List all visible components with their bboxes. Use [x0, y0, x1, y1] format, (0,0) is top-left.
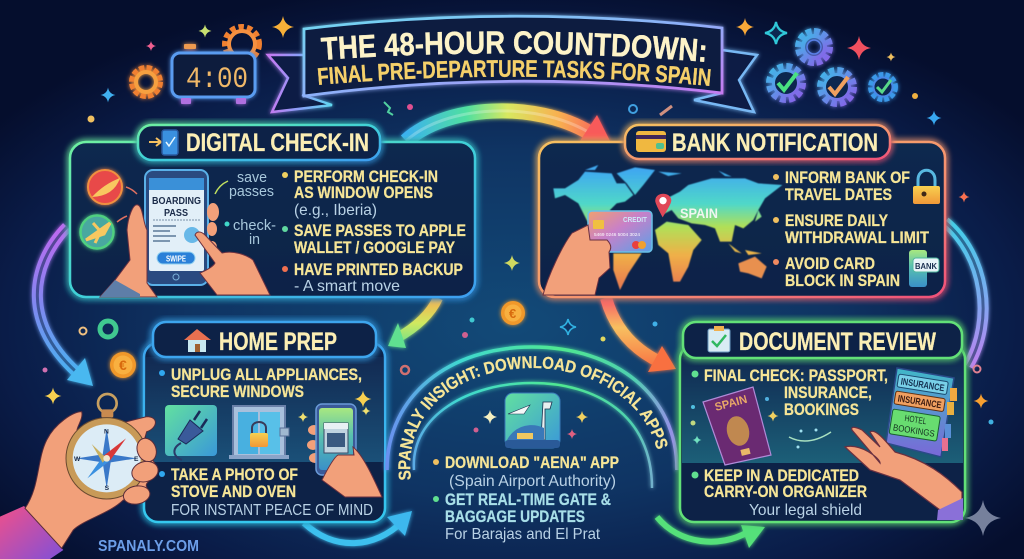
- bullet text bottom: KEEP IN A DEDICATED: [704, 467, 859, 485]
- phone with stove and hand: [307, 404, 382, 497]
- tab hotel bookings: BOOKINGS: [892, 422, 935, 439]
- bullet text top: SECURE WINDOWS: [171, 383, 304, 401]
- arrow: digital check-in to compass: [37, 227, 93, 386]
- bullet text top: [159, 366, 362, 401]
- compass letters: E: [134, 456, 139, 463]
- ribbon right tail: [694, 50, 757, 112]
- bullet text: INFORM BANK OF: [785, 169, 910, 187]
- panel frame: [680, 345, 965, 522]
- bullet text bottom: FOR INSTANT PEACE OF MIND: [171, 502, 373, 519]
- passport: SPAIN: [714, 394, 749, 414]
- palm: [322, 447, 382, 497]
- caption check-in: in: [249, 232, 260, 248]
- bullet text bottom: CARRY-ON ORGANIZER: [704, 483, 867, 501]
- icon: blue gear: [799, 32, 829, 62]
- phone screen: [149, 178, 204, 271]
- tab insurance two: INSURANCE: [897, 393, 942, 411]
- sparkles near app: [474, 410, 588, 439]
- icon: padlock: [913, 170, 940, 204]
- bullet text: BLOCK IN SPAIN: [785, 272, 900, 290]
- compass needles: [77, 428, 137, 488]
- icon: clipboard check: [708, 326, 730, 352]
- bullet text: AS WINDOW OPENS: [294, 184, 433, 202]
- arrow: bank to document orange: [606, 298, 676, 372]
- bullet text: WALLET / GOOGLE PAY: [294, 239, 455, 257]
- icon: euro coin center: [501, 301, 525, 325]
- bullet text bottom: TAKE A PHOTO OF: [171, 466, 298, 484]
- tab hotel bookings: [889, 409, 940, 441]
- bullet text: ENSURE DAILY: [785, 212, 888, 230]
- bullet text: AVOID CARD: [785, 255, 875, 273]
- bullet text: WITHDRAWAL LIMIT: [785, 229, 929, 247]
- icon: airline red: [88, 170, 122, 204]
- organizer folder: [886, 368, 957, 457]
- phone: [316, 404, 356, 475]
- arrow: home prep to insight: [304, 511, 412, 543]
- icon: euro coin left: [110, 352, 136, 378]
- pointing hand: [195, 232, 270, 295]
- icon: digital clock: 4:00: [186, 63, 248, 97]
- upper band: [146, 357, 383, 462]
- caption check-in: [233, 218, 276, 248]
- icon: euro coin left: €: [119, 357, 127, 373]
- tab hotel bookings: HOTEL: [904, 413, 927, 426]
- panel frame: [70, 142, 475, 297]
- ripple: [184, 227, 200, 243]
- arrow: insight to document review: [657, 517, 765, 548]
- ribbon body: [304, 16, 722, 96]
- credit card illustration: [588, 211, 652, 252]
- small connector marks: [215, 181, 228, 194]
- illustration: hand holding compass: [0, 394, 160, 559]
- bullet text: BAGGAGE UPDATES: [445, 508, 585, 526]
- bullet text: [773, 169, 929, 290]
- credit card illustration: CREDIT: [623, 215, 647, 224]
- swipe button: [157, 252, 195, 264]
- bullet text bottom: [159, 466, 373, 519]
- compass letters: W: [74, 456, 81, 463]
- phone body: [145, 170, 208, 285]
- connector lines: [117, 187, 137, 222]
- pass lines: [153, 219, 200, 221]
- pass text: PASS: [164, 207, 188, 219]
- icon: phone with arrow: [149, 130, 178, 155]
- panel frame: [539, 142, 945, 297]
- compass letters: S: [105, 485, 110, 492]
- caption check-in: check-: [233, 218, 276, 234]
- sparkle and smile decoration: [690, 397, 831, 448]
- arrow: bank to home prep: [388, 298, 438, 348]
- clock and gears decoration: [132, 28, 258, 104]
- boarding pass text: BOARDING: [152, 195, 201, 207]
- compass letters: N: [104, 428, 109, 435]
- panel: bank notification: [539, 125, 945, 297]
- bullet text top: UNPLUG ALL APPLIANCES,: [171, 366, 362, 384]
- arrow: digital check-in to bank notification: [406, 111, 612, 145]
- heading: HOME PREP: [219, 328, 337, 356]
- heading: DOCUMENT REVIEW: [739, 328, 936, 356]
- icon: plug tile: [165, 405, 217, 460]
- icon: euro coin center: €: [509, 306, 516, 321]
- icon: map pin: [655, 194, 671, 217]
- passport: [703, 387, 771, 465]
- title line two: FINAL PRE-DEPARTURE TASKS FOR SPAIN: [318, 60, 711, 86]
- header pill: [683, 322, 962, 358]
- open hand: [845, 427, 962, 510]
- brand url: SPANALY.COM: [98, 538, 199, 555]
- icon: credit card: [636, 131, 666, 152]
- stove: [324, 423, 348, 453]
- sleeve: [937, 498, 963, 520]
- icon: phone with bank bubble: BANK: [915, 261, 938, 271]
- icon: check gear one: [770, 67, 802, 99]
- world map: [553, 165, 782, 290]
- bullet text top: [692, 367, 888, 419]
- curved heading: SPANALY INSIGHT: DOWNLOAD OFFICIAL APPS: [398, 356, 668, 480]
- heading: BANK NOTIFICATION: [672, 129, 878, 157]
- bullet text: - A smart move: [294, 278, 400, 295]
- header pill: [138, 125, 380, 160]
- bullet text: HAVE PRINTED BACKUP: [294, 261, 463, 279]
- icon: airline green: [80, 216, 114, 248]
- bullet text bottom: Your legal shield: [749, 502, 862, 519]
- ribbon left tail: [268, 55, 332, 112]
- compass letters: [74, 428, 139, 492]
- icon: phone with bank bubble: [909, 250, 939, 287]
- icon: locked window: [229, 406, 289, 459]
- icon: house: [184, 329, 211, 352]
- bullet text: [433, 454, 619, 543]
- illustration: phone and hands: [100, 170, 270, 297]
- bullet text: (Spain Airport Authority): [449, 473, 616, 490]
- icon: gear behind clock: [226, 28, 258, 60]
- outer and inner arcs: [387, 347, 677, 488]
- fingers: [122, 436, 160, 506]
- header pill: [625, 125, 890, 159]
- bullet text top: BOOKINGS: [784, 401, 859, 419]
- hand: [25, 412, 157, 548]
- bullet text: GET REAL-TIME GATE &: [445, 491, 611, 509]
- caption save passes: [229, 170, 274, 200]
- panel frame: [144, 343, 385, 522]
- icon: orange gear: [132, 68, 160, 96]
- bullet text: (e.g., Iberia): [294, 202, 377, 219]
- bullet text bottom: STOVE AND OVEN: [171, 483, 296, 501]
- panel: document review: [680, 322, 965, 522]
- bullet text: PERFORM CHECK-IN: [294, 168, 438, 186]
- panel: spanaly insight: [382, 342, 679, 543]
- icon: check gear three: [871, 75, 895, 99]
- sparkles near window: [298, 390, 372, 422]
- title line one: THE 48-HOUR COUNTDOWN:: [320, 31, 706, 62]
- bullet text: TRAVEL DATES: [785, 186, 892, 204]
- hand holding card: [543, 225, 611, 295]
- panel: digital check-in: [70, 125, 475, 297]
- arrow: bank notification to document review: [945, 222, 983, 366]
- bullet text: DOWNLOAD "AENA" APP: [445, 454, 619, 472]
- swipe button: SWIPE: [166, 254, 187, 264]
- sleeve: [0, 506, 63, 559]
- caption save passes: save: [237, 170, 267, 186]
- bullet text: For Barajas and El Prat: [445, 526, 601, 543]
- title banner: [264, 12, 762, 116]
- compass ring: [98, 394, 117, 413]
- icon: airport app: [505, 393, 560, 448]
- header pill: [153, 322, 376, 357]
- compass body: [66, 418, 147, 499]
- spain label: SPAIN: [680, 206, 718, 221]
- bullet text: [224, 168, 466, 295]
- bullet text top: FINAL CHECK: PASSPORT,: [704, 367, 888, 385]
- bullet text: SAVE PASSES TO APPLE: [294, 222, 466, 240]
- heading: DIGITAL CHECK-IN: [186, 129, 369, 157]
- left hand: [100, 205, 157, 297]
- caption save passes: passes: [229, 184, 274, 200]
- fingers: [308, 425, 320, 435]
- credit card illustration: 5469 0246 5004 3024: [594, 232, 641, 237]
- bullet text top: INSURANCE,: [784, 384, 872, 402]
- icon: check gear two: [821, 71, 853, 103]
- panel: home prep: [144, 322, 385, 522]
- tab insurance one: INSURANCE: [900, 376, 945, 394]
- upper band: [682, 358, 963, 463]
- bullet text bottom: [692, 467, 867, 519]
